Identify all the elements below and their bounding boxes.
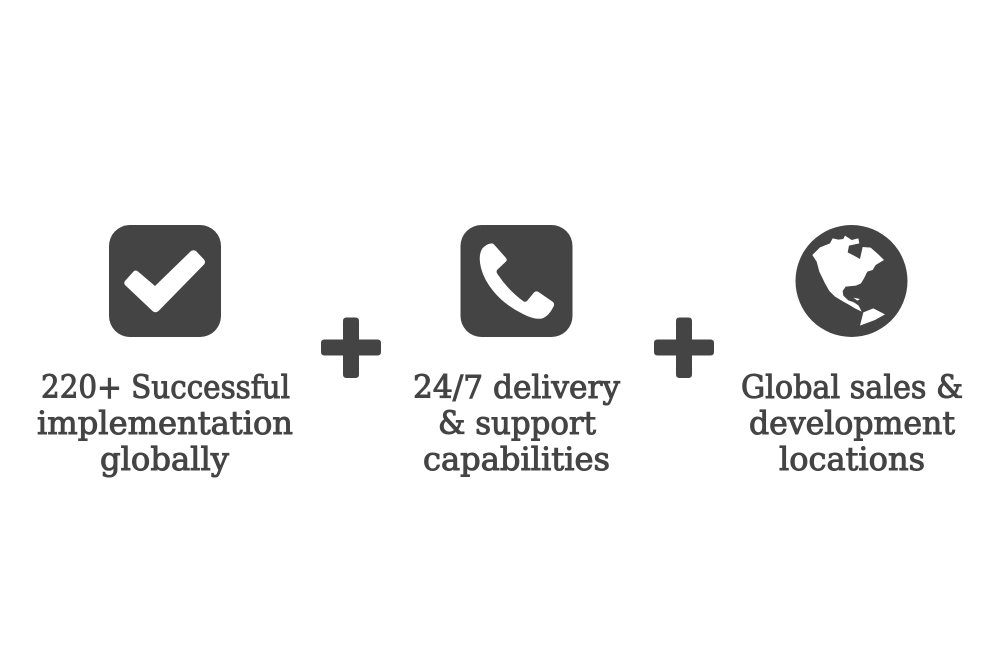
icon: checkmark in rounded square	[109, 225, 221, 337]
text: 24/7 delivery and support capabilities: capabilities	[423, 440, 610, 478]
text: 220+ Successful implementation globally: globally	[100, 440, 229, 478]
text: 220+ Successful implementation globally: implementation	[37, 404, 293, 442]
text: Global sales and development locations: locations	[779, 440, 925, 478]
icon: telephone handset in rounded square	[460, 225, 572, 337]
text: Global sales and development locations: Global sales &	[741, 368, 963, 406]
text: Global sales and development locations: development	[749, 404, 955, 442]
text: Global sales and development locations	[741, 368, 963, 478]
plus sign 1	[321, 318, 381, 378]
text: 220+ Successful implementation globally: 220+ Successful	[41, 368, 290, 406]
icon: globe showing the Americas	[796, 225, 908, 337]
text: 220+ Successful implementation globally	[37, 368, 293, 478]
text: 24/7 delivery and support capabilities: 24/7 delivery	[413, 368, 620, 406]
text: 24/7 delivery and support capabilities: & support	[438, 404, 596, 442]
text: 24/7 delivery and support capabilities	[413, 368, 620, 478]
plus sign 2	[654, 318, 714, 378]
